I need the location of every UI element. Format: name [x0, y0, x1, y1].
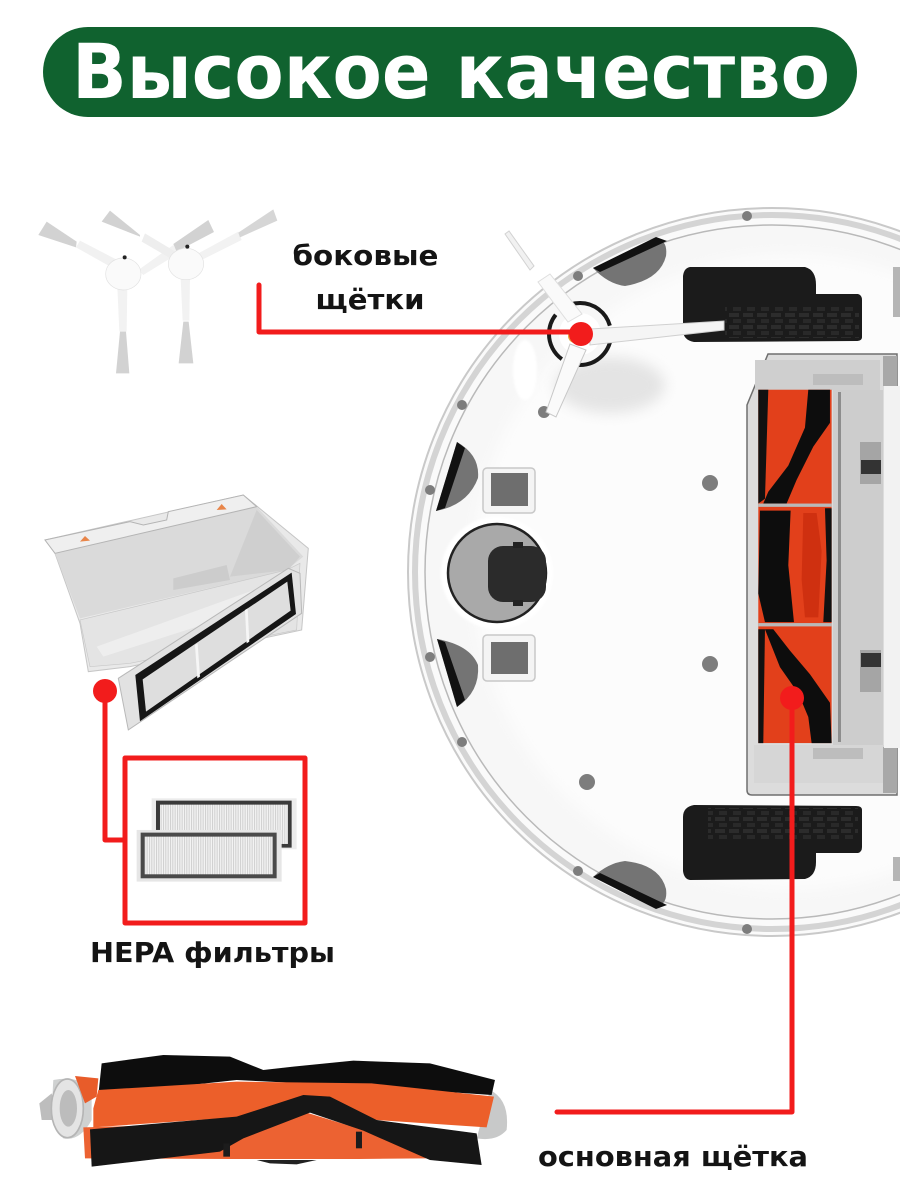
main brush label: основная щётка [538, 1140, 808, 1173]
main brush in robot [758, 390, 832, 743]
drive wheel top [683, 267, 862, 342]
side brushes label: боковые [292, 239, 438, 272]
robot underside [408, 208, 900, 936]
cliff sensors [436, 237, 667, 909]
title: Высокое качество [72, 27, 830, 116]
dust box with filter [45, 495, 308, 730]
side brushes label [292, 239, 438, 316]
caster wheel [446, 522, 548, 624]
side brush on robot [505, 231, 724, 417]
rim dots [425, 211, 752, 934]
callout: hepa filters [93, 679, 305, 923]
side brushes label: щётки [316, 283, 424, 316]
drive wheel bottom [683, 805, 862, 880]
callout: main brush [557, 686, 804, 1112]
callout: side brushes [259, 285, 593, 346]
charging pads [483, 468, 535, 681]
brush housing [747, 267, 900, 881]
side brushes product [38, 209, 277, 373]
main brush product [39, 1055, 507, 1167]
filter label: HEPA фильтры [90, 936, 335, 969]
hepa filters [137, 798, 297, 882]
